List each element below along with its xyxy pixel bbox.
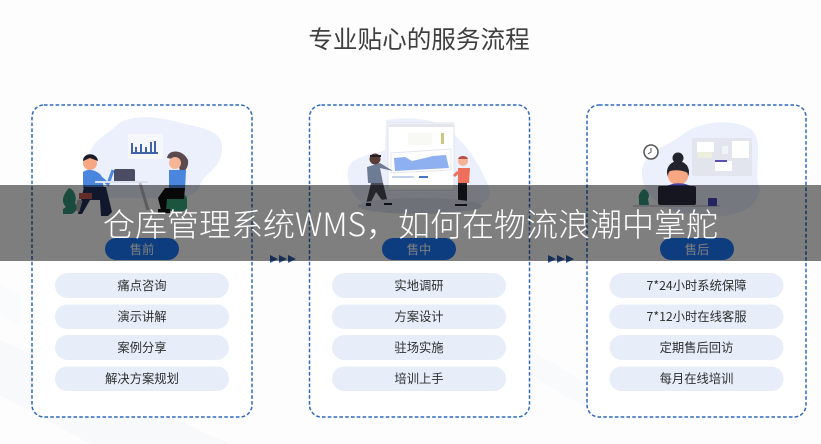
list: 售前 items: [55, 273, 229, 391]
list: 售后 items: 定期售后回访: [660, 338, 733, 356]
illustration: consultation at a table: [63, 117, 222, 216]
list: 售前 items: 案例分享: [117, 338, 167, 356]
arrow: 售前 to 售中: [270, 255, 296, 263]
list: 售中 items: [332, 273, 506, 391]
list: 售中 items: 驻场实施: [394, 338, 444, 356]
overlay banner: [0, 185, 821, 261]
panel: 售中: [310, 105, 530, 417]
button: 售后: [660, 238, 734, 260]
button: 售前: [105, 238, 179, 260]
list: 售中 items: 方案设计: [394, 307, 444, 325]
list: 售中 items: 培训上手: [394, 369, 444, 387]
list: 售后 items: 7*12小时在线客服: [646, 307, 746, 325]
button: 售后: 售后: [685, 240, 709, 258]
illustration: two people holding a chart board: [348, 118, 490, 214]
list: 售中 items: 实地调研: [394, 276, 444, 294]
list: 售后 items: 7*24小时系统保障: [646, 276, 746, 294]
list: 售后 items: 每月在线培训: [660, 369, 733, 387]
arrow: 售中 to 售后: [548, 255, 574, 263]
button: 售前: 售前: [130, 240, 154, 258]
list: 售后 items: [610, 273, 784, 391]
title: 专业贴心的服务流程: [308, 20, 530, 56]
illustration: woman working at a laptop: [633, 122, 760, 217]
button: 售中: [382, 238, 456, 260]
panel: 售后: [587, 105, 806, 417]
list: 售前 items: 解决方案规划: [105, 369, 179, 387]
panel: 售前: [32, 105, 252, 417]
list: 售前 items: 痛点咨询: [117, 276, 167, 294]
button: 售中: 售中: [407, 240, 431, 258]
banner headline: 仓库管理系统WMS，如何在物流浪潮中掌舵: [103, 200, 718, 246]
list: 售前 items: 演示讲解: [117, 307, 167, 325]
